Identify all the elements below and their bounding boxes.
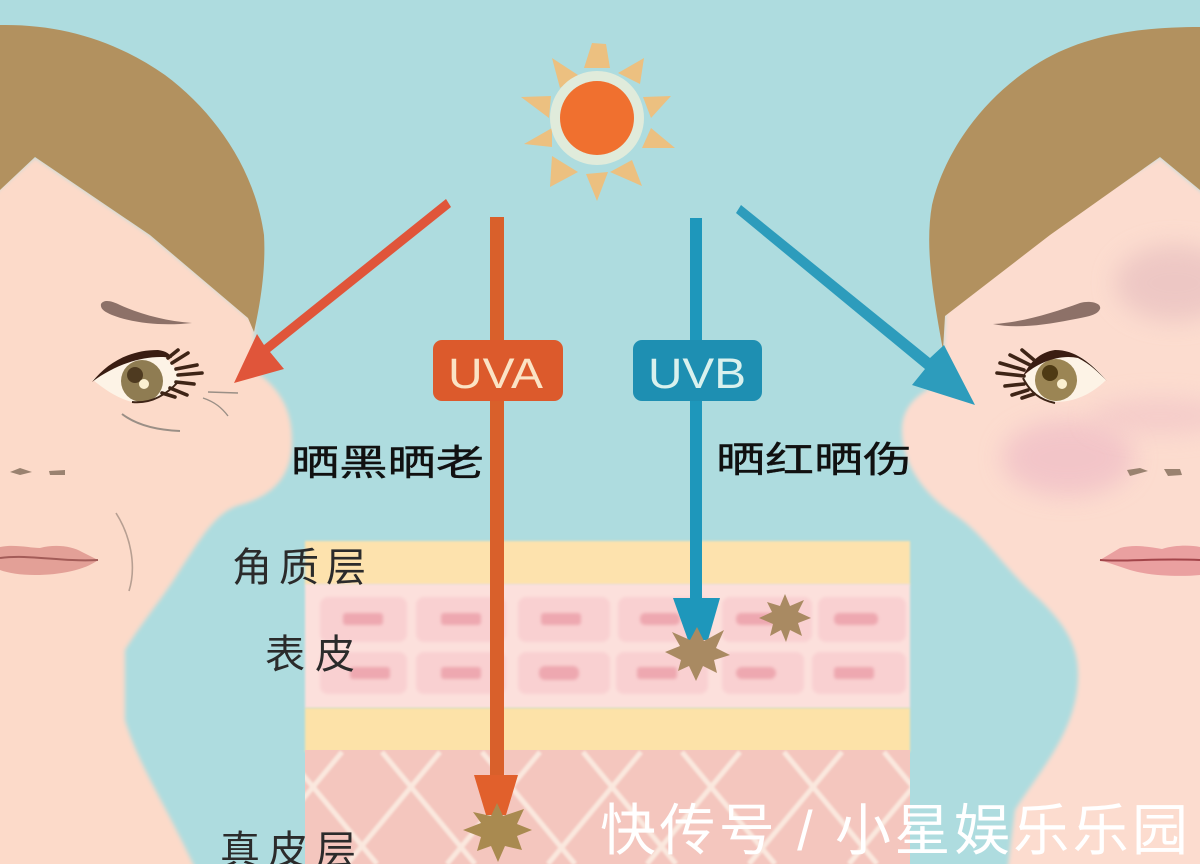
caption: tanning and aging: 晒黑晒老: [291, 442, 484, 483]
sun disc: [560, 81, 634, 155]
left face: [0, 25, 292, 864]
label: stratum corneum: 角质层: [232, 535, 366, 593]
UVA diagonal arrow: [234, 199, 451, 383]
yellow layer: [305, 708, 910, 752]
blush forehead: [1115, 245, 1200, 321]
face skin: [0, 157, 292, 864]
epidermis: [305, 584, 910, 708]
skin layers diagram: [304, 540, 912, 864]
hair: [0, 25, 264, 332]
UVA badge: UVA: [448, 350, 543, 398]
damage star: dermis: [463, 803, 532, 862]
sun rays: [521, 43, 675, 201]
watermark: 快传号 / 小星娱乐乐园: [600, 799, 1188, 862]
eye: [92, 350, 202, 402]
blush cheek band: [1090, 398, 1200, 434]
dermis: [305, 750, 910, 864]
UVB vertical arrow: [673, 218, 720, 640]
nostrils: [1127, 468, 1182, 476]
caption: sunburn and damage: 晒红晒伤: [716, 439, 912, 480]
face skin: [902, 157, 1200, 864]
stratum corneum: [305, 541, 910, 585]
lips: [0, 546, 98, 575]
wrinkles: [116, 392, 238, 591]
UVB badge: UVB: [648, 350, 746, 398]
damage star: epidermis small: [759, 594, 811, 642]
label: epidermis: 表皮: [265, 622, 355, 680]
nostrils: [10, 468, 65, 475]
blush cheek: [1002, 420, 1134, 496]
labels: skin layers: [220, 535, 366, 864]
sun: [521, 43, 675, 201]
right face: [902, 27, 1200, 864]
eyebrow: [993, 302, 1100, 326]
UVB badge: [633, 340, 762, 401]
sun halo: [550, 71, 644, 165]
cell nuclei: [343, 613, 878, 680]
hair: [929, 27, 1200, 350]
epidermis cells: [320, 597, 906, 694]
eye: [997, 350, 1107, 403]
eyebrow: [101, 301, 192, 324]
UVA badge: [433, 340, 563, 401]
UVB diagonal arrow: [736, 205, 975, 405]
UVA vertical arrow: [474, 217, 518, 815]
damage star: epidermis large: [665, 627, 730, 681]
lips: [1100, 546, 1200, 576]
